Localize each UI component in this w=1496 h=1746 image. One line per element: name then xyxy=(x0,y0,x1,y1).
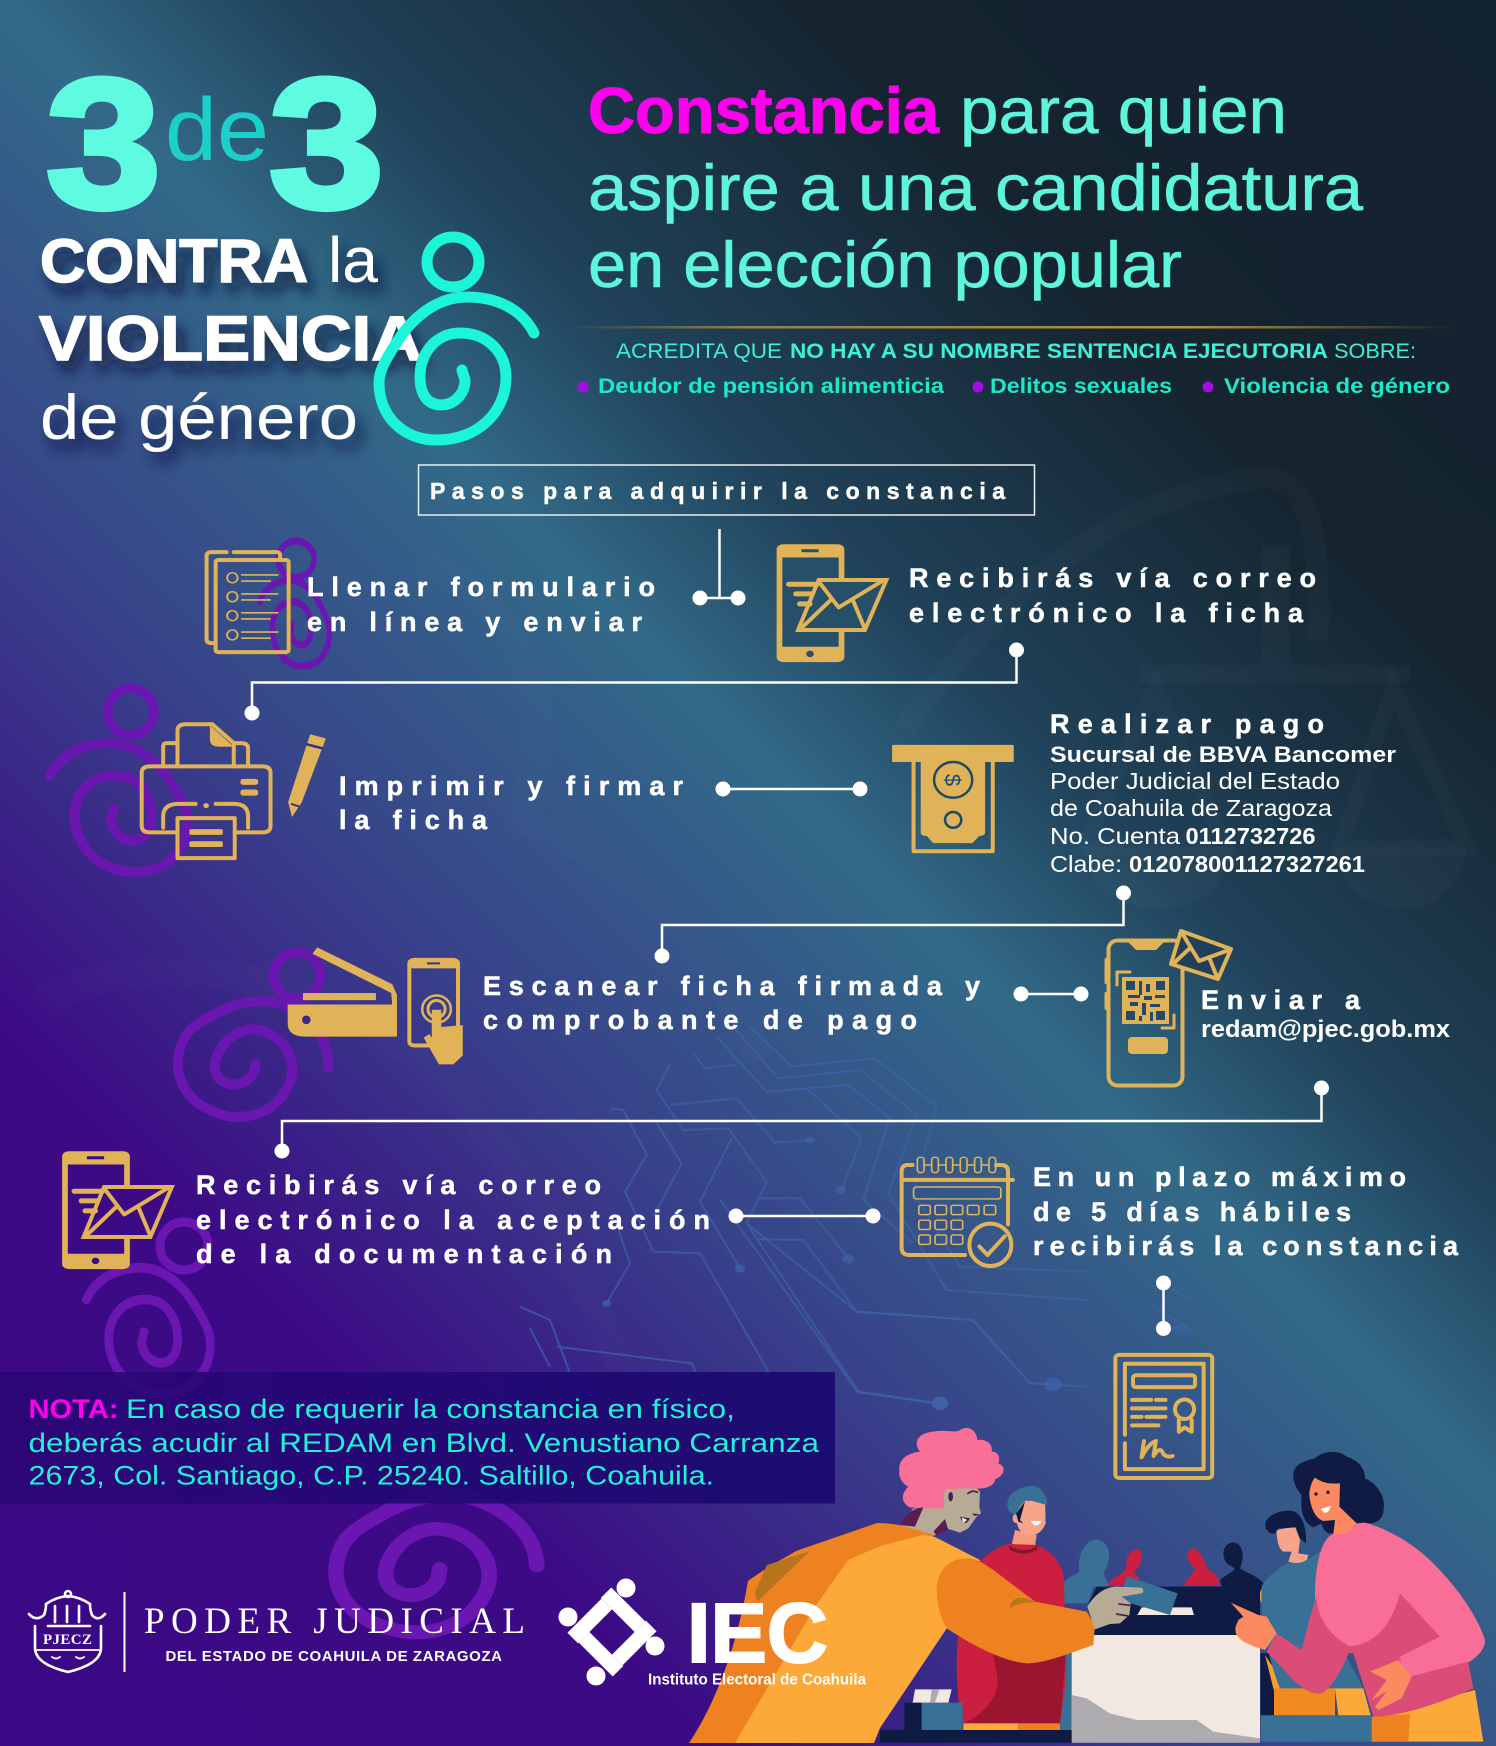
step text: realizar pago: Poder Judicial del Estado xyxy=(1050,768,1340,794)
step text: llenar formulario: en línea y enviar xyxy=(307,607,642,637)
woman in pink xyxy=(1231,1452,1485,1742)
list: sentencias: Deudor de pensión alimenticia xyxy=(598,375,944,398)
step text: imprimir y firmar xyxy=(339,771,683,835)
step text: recibirás aceptación xyxy=(196,1170,710,1269)
step text: realizar pago: No. Cuenta xyxy=(1050,823,1180,849)
step text: escanear ficha: Escanear ficha firmada y xyxy=(483,971,980,1001)
watermark: circuit lines xyxy=(520,1027,1087,1413)
icon: scanner xyxy=(288,947,397,1037)
icon: certificate xyxy=(1115,1355,1212,1478)
step text: realizar pago: de Coahuila de Zaragoza xyxy=(1050,795,1332,821)
step text: recibirás aceptación: electrónico la aceptación xyxy=(196,1205,710,1235)
title: 3 de 3: 3 xyxy=(269,40,384,246)
icon: pencil xyxy=(288,734,326,817)
navy silhouette xyxy=(1190,1542,1263,1637)
icon: phone with QR and envelope xyxy=(1104,931,1231,1086)
step text: realizar pago: Realizar pago xyxy=(1050,709,1324,739)
text block: acredita: NO HAY A SU NOMBRE SENTENCIA EJECUTORIA xyxy=(790,340,1328,363)
title: contra la violencia de género: CONTRA xyxy=(40,227,308,295)
step text: llenar formulario: Llenar formulario xyxy=(307,572,655,602)
step text: plazo: En un plazo máximo xyxy=(1033,1162,1406,1192)
list: sentencias xyxy=(578,375,1450,398)
icon: spiral person xyxy=(379,237,534,440)
title: 3 de 3 xyxy=(46,40,384,246)
icon: cash slot xyxy=(892,745,1014,851)
title: 3 de 3: 3 xyxy=(46,40,161,246)
heading: pasos xyxy=(418,465,1034,515)
step text: escanear ficha: comprobante de pago xyxy=(483,1005,917,1035)
man in red xyxy=(957,1486,1072,1730)
logo: poder judicial text: PODER JUDICIAL xyxy=(144,1601,525,1642)
step text: realizar pago xyxy=(1050,709,1396,877)
text block: acredita xyxy=(616,340,1416,363)
icon: phone touch xyxy=(409,960,463,1064)
icon: phone with envelope xyxy=(777,544,886,662)
panel: nota xyxy=(0,1372,835,1504)
step text: plazo xyxy=(1033,1162,1459,1261)
step text: enviar a xyxy=(1201,985,1451,1043)
logo: poder judicial text xyxy=(144,1601,525,1665)
heading: constancia para quien aspire: aspire a una candidatura xyxy=(588,151,1364,224)
step text: recibirás aceptación: Recibirás vía correo xyxy=(196,1170,601,1200)
heading: pasos: Pasos para adquirir la constancia xyxy=(430,478,1005,504)
title: contra la violencia de género: de género xyxy=(40,383,358,453)
step text: recibirás ficha xyxy=(909,563,1316,628)
panel: nota: En caso de requerir la constancia en físico, xyxy=(126,1394,735,1424)
step text: realizar pago: Clabe: xyxy=(1050,851,1122,877)
connectors xyxy=(244,529,1329,1336)
heading: constancia para quien aspire xyxy=(588,74,1364,301)
text block: acredita: SOBRE: xyxy=(1334,340,1416,363)
logo: IEC: Instituto Electoral de Coahuila xyxy=(648,1672,866,1688)
logo: IEC: IEC xyxy=(687,1586,828,1680)
step text: escanear ficha xyxy=(483,971,980,1035)
heading: constancia para quien aspire: para quien xyxy=(960,74,1287,147)
ballot box xyxy=(880,1576,1260,1743)
man in blue xyxy=(1258,1511,1372,1742)
icon: phone with envelope 2 xyxy=(62,1151,172,1269)
step text: realizar pago: Sucursal de BBVA Bancomer xyxy=(1050,742,1396,767)
list: sentencias: Delitos sexuales xyxy=(990,375,1172,398)
step text: llenar formulario xyxy=(307,572,655,637)
step text: recibirás ficha: electrónico la ficha xyxy=(909,598,1304,628)
logo: PJECZ shield xyxy=(29,1591,105,1672)
illustration: people voting xyxy=(689,1428,1485,1743)
logo: IEC xyxy=(558,1578,866,1688)
icon: form xyxy=(207,552,289,652)
icon: cash slot: $ xyxy=(940,774,965,786)
step text: imprimir y firmar: Imprimir y firmar xyxy=(339,771,683,801)
watermark: scales of justice xyxy=(40,477,1467,1420)
title: 3 de 3: de xyxy=(165,79,269,179)
step text: recibirás ficha: Recibirás vía correo xyxy=(909,563,1316,593)
step text: realizar pago: 012078001127327261 xyxy=(1129,851,1365,877)
title: contra la violencia de género xyxy=(39,224,422,453)
panel: nota: NOTA: xyxy=(28,1394,118,1424)
text block: acredita: ACREDITA QUE xyxy=(616,340,782,363)
heading: constancia para quien aspire: Constancia xyxy=(588,74,940,147)
step text: realizar pago: 0112732726 xyxy=(1186,823,1316,849)
heading: constancia para quien aspire: en elección popular xyxy=(588,228,1182,301)
icon: printer xyxy=(142,724,271,858)
step text: enviar a: Enviar a xyxy=(1201,985,1361,1015)
logo: PJECZ shield: PJECZ xyxy=(43,1632,92,1648)
icon: calendar xyxy=(902,1157,1013,1266)
step text: enviar a: redam@pjec.gob.mx xyxy=(1201,1016,1451,1043)
title: contra la violencia de género: la xyxy=(328,224,378,296)
silhouettes behind the ballot box xyxy=(1064,1539,1220,1603)
step text: plazo: de 5 días hábiles xyxy=(1033,1197,1351,1227)
watermark: purple spirals xyxy=(50,541,555,1667)
step text: recibirás aceptación: de la documentación xyxy=(196,1239,612,1269)
man in orange xyxy=(689,1428,1143,1743)
panel: nota: deberás acudir al REDAM en Blvd. Venustiano Carranza xyxy=(28,1428,820,1458)
logo: poder judicial text: DEL ESTADO DE COAHUILA DE ZARAGOZA xyxy=(166,1648,502,1665)
step text: plazo: recibirás la constancia xyxy=(1033,1231,1459,1261)
panel: nota: 2673, Col. Santiago, C.P. 25240. Saltillo, Coahuila. xyxy=(28,1460,714,1490)
title: contra la violencia de género: VIOLENCIA xyxy=(39,304,422,374)
step text: imprimir y firmar: la ficha xyxy=(339,805,488,835)
list: sentencias: Violencia de género xyxy=(1224,375,1450,398)
